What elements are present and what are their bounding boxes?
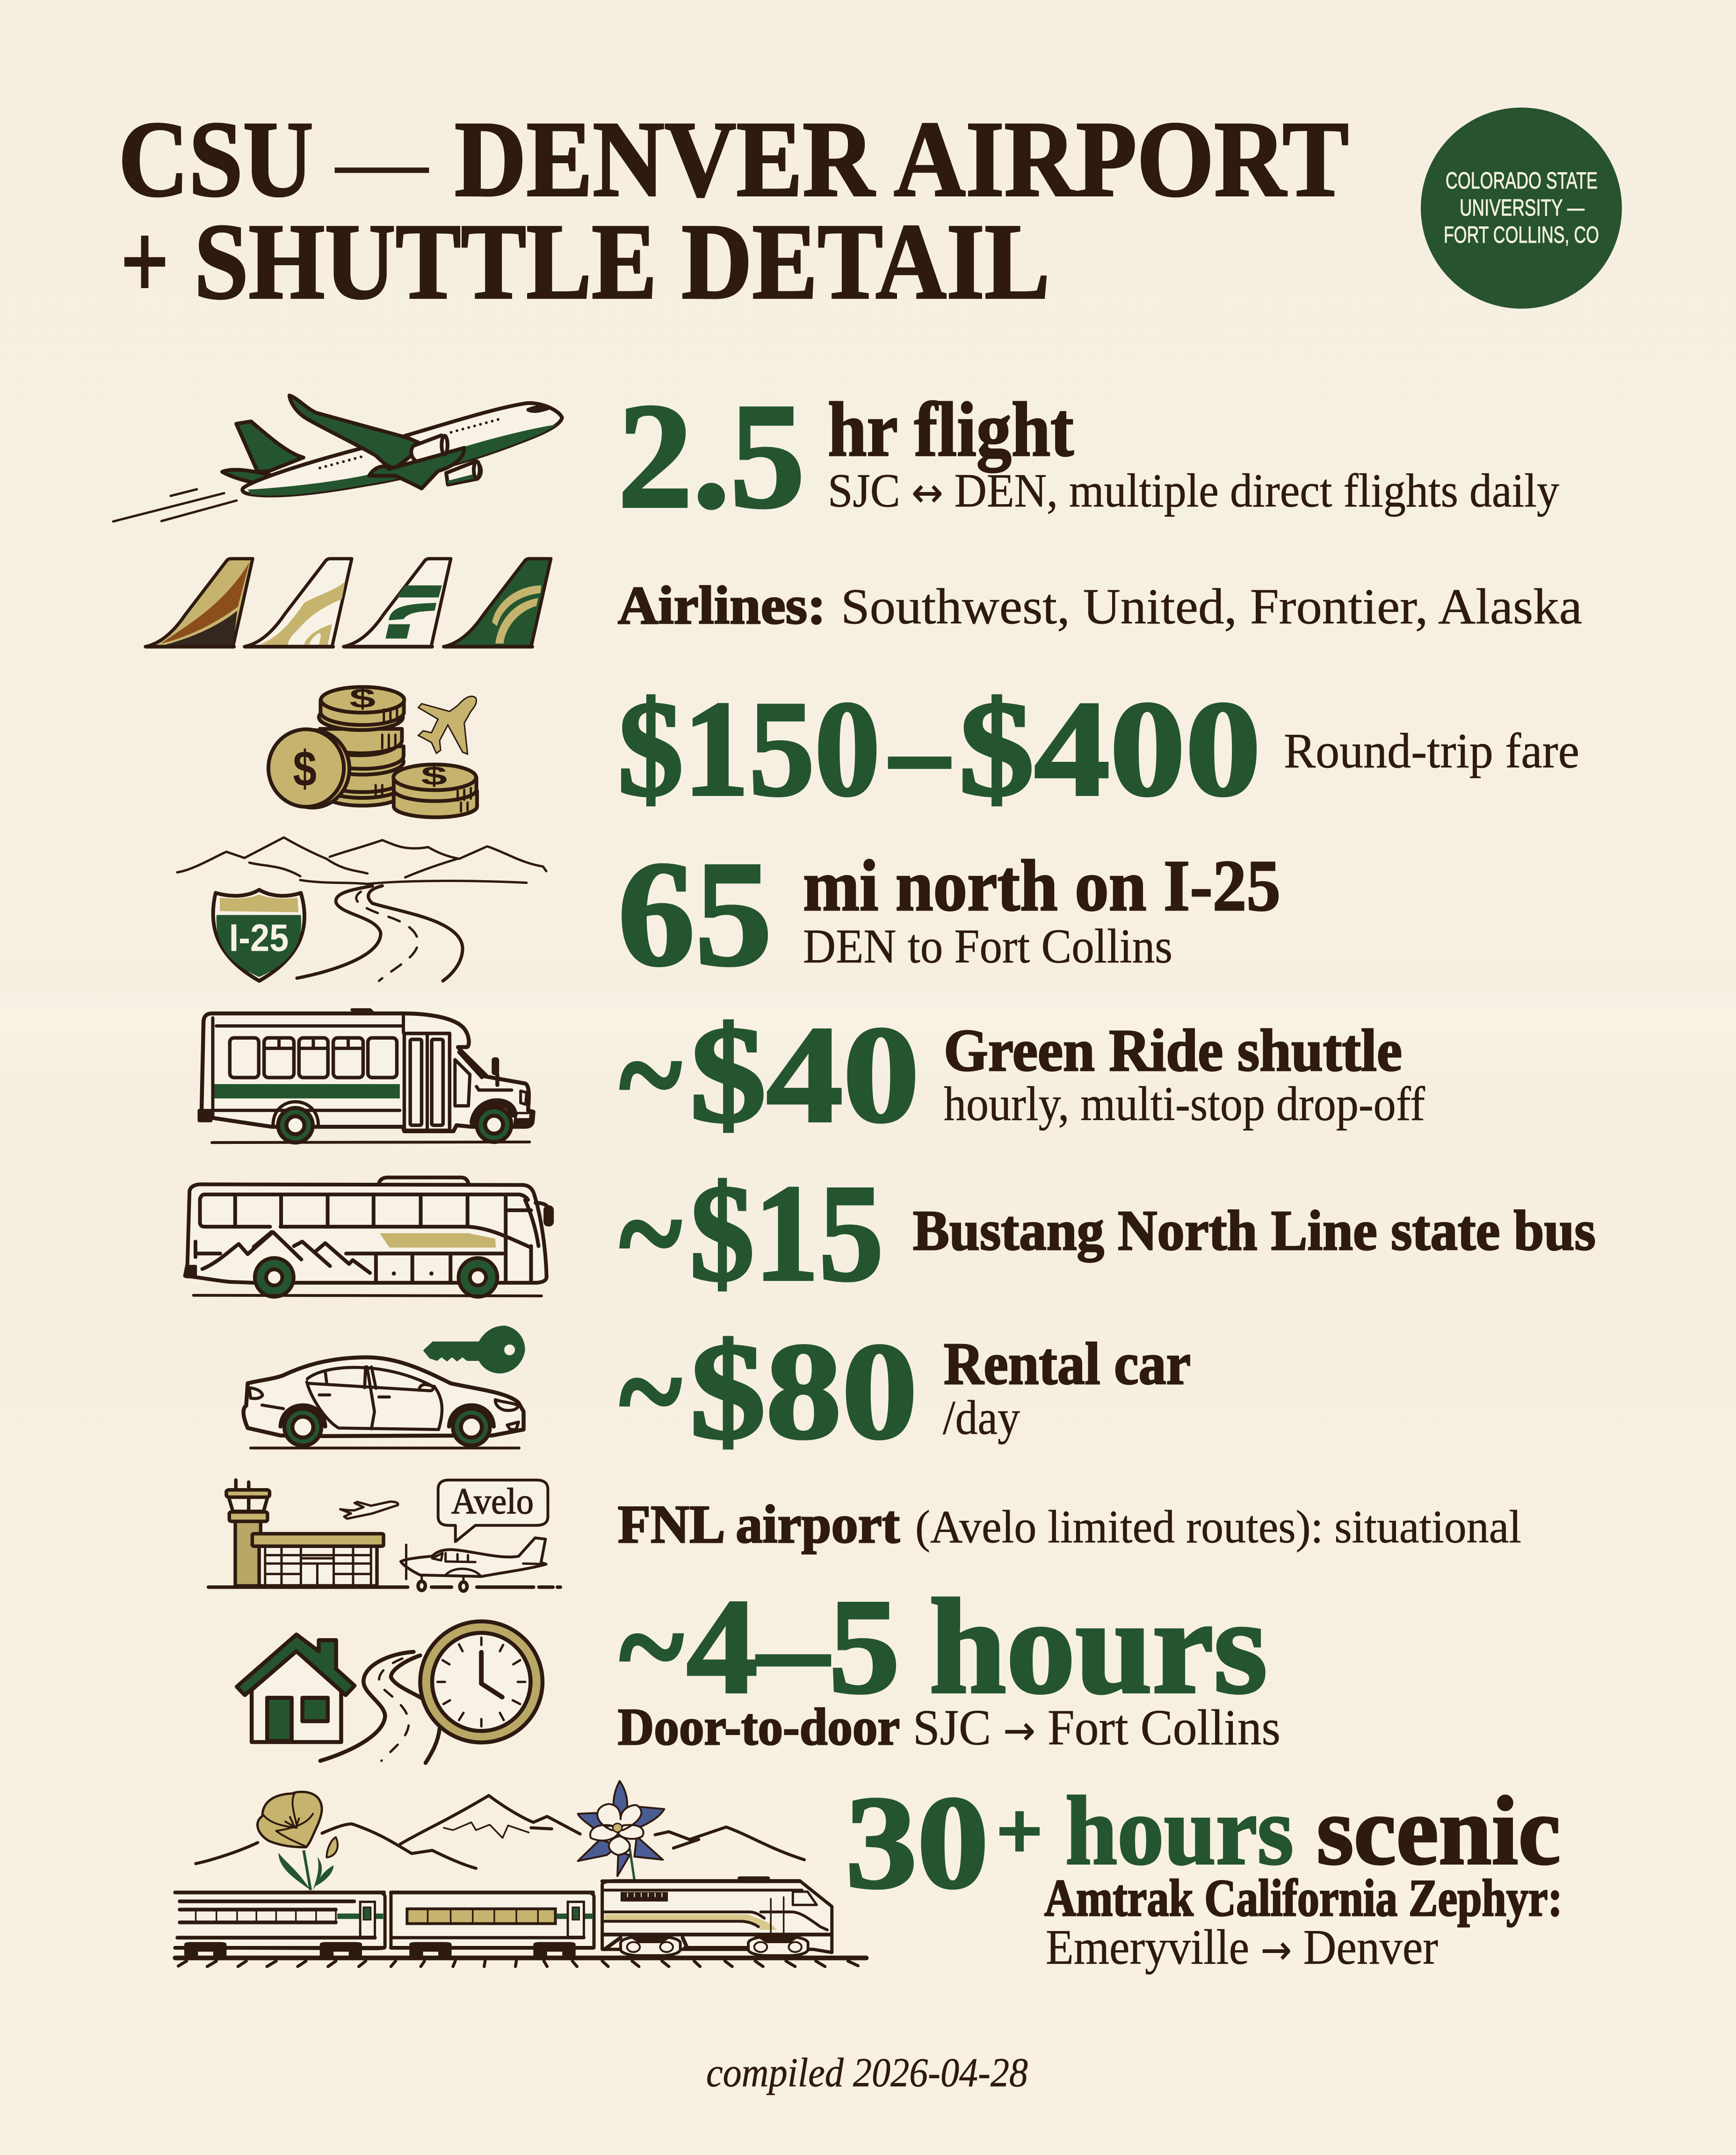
stat: fare range	[618, 673, 1261, 824]
stat: 30+	[846, 1769, 1042, 1916]
passenger car two	[391, 1893, 594, 1956]
stat: 30+: 30	[846, 1769, 989, 1916]
stat: ~$40	[620, 998, 919, 1151]
tail two	[245, 559, 352, 647]
badge: Colorado State University: COLORADO STATE	[1446, 167, 1598, 194]
title: DENVER AIRPORT	[455, 99, 1349, 219]
row: state bus	[185, 1157, 1596, 1310]
stat: ~$80: $80	[690, 1315, 918, 1468]
stat: fare range: –	[888, 673, 951, 824]
title: SHUTTLE DETAIL	[194, 202, 1050, 322]
tail four	[444, 559, 551, 647]
stat: ~$15: $15	[690, 1157, 883, 1310]
heading: scenic: scenic	[1316, 1777, 1561, 1885]
text: route: SJC ↔ DEN, multiple direct flights daily	[828, 464, 1559, 517]
track	[175, 1958, 866, 1967]
badge: Colorado State University	[1421, 108, 1622, 309]
heading: FNL airport: FNL airport	[618, 1495, 900, 1555]
stat: ~$40: $40	[690, 998, 919, 1151]
stat: ~4–5 hours: hours	[929, 1571, 1267, 1721]
icon: airport terminal and small plane	[209, 1480, 560, 1591]
heading: hr flight: hr flight	[828, 386, 1074, 473]
footer: compiled date: compiled 2026-04-28	[706, 2050, 1028, 2096]
icon: four tail fins	[145, 559, 551, 647]
title	[118, 99, 1349, 322]
icon: coins with plane	[268, 683, 477, 817]
text: hourly drop-off: hourly, multi-stop drop-off	[944, 1077, 1425, 1131]
label: Amtrak California Zephyr: Amtrak California Zephyr:	[1044, 1869, 1562, 1927]
text: round-trip fare: Round-trip fare	[1284, 723, 1579, 778]
heading: Rental car: Rental car	[944, 1331, 1191, 1397]
title: +	[121, 202, 169, 322]
heading: Green Ride shuttle: Green Ride shuttle	[944, 1017, 1402, 1084]
shield: I-25	[229, 916, 289, 960]
stat: ~4–5 hours: ~	[620, 1571, 683, 1721]
row: Amtrak scenic	[175, 1769, 1562, 1974]
icon: train, mountains and flowers	[175, 1781, 866, 1967]
icon: coins with plane: $	[349, 683, 376, 714]
badge: Colorado State University: UNIVERSITY —	[1460, 195, 1584, 221]
icon: shuttle bus	[197, 1010, 534, 1143]
icon: house, road and clock	[237, 1621, 542, 1763]
stat: ~4–5 hours	[620, 1571, 1267, 1721]
tail one	[145, 559, 253, 647]
icon: coins with plane: $	[293, 741, 317, 797]
heading: mi north on I-25: mi north on I-25	[803, 845, 1280, 926]
stat: ~$80	[620, 1315, 918, 1468]
passenger car one	[175, 1893, 385, 1956]
key	[423, 1326, 525, 1374]
row: door-to-door time	[237, 1571, 1280, 1763]
text: Avelo limited routes: (Avelo limited routes): situational	[915, 1501, 1521, 1553]
label: Airlines: Airlines:	[618, 576, 826, 636]
icon: car and key	[244, 1326, 525, 1448]
text: airline names: Southwest, United, Frontier, Alaska	[841, 579, 1582, 635]
text: Emeryville to Denver: Emeryville → Denver	[1046, 1920, 1438, 1974]
title: —	[334, 99, 429, 219]
stat: ~$80: ~	[620, 1315, 681, 1468]
poppy	[258, 1792, 338, 1890]
icon: mountains, road and I-25 shield	[177, 838, 546, 981]
row: rental car	[244, 1315, 1191, 1468]
row: distance	[177, 830, 1280, 997]
heading: Bustang North Line state bus: Bustang North Line state bus	[913, 1199, 1596, 1262]
stat: fare range: $150	[618, 673, 880, 824]
mountains	[196, 1795, 804, 1868]
text: per day: /day	[943, 1391, 1020, 1445]
columbine	[578, 1781, 664, 1880]
row: FNL airport	[209, 1480, 1521, 1591]
stat: fare range: $400	[959, 673, 1261, 824]
stat: ~$15: ~	[620, 1157, 681, 1310]
stat: 65: 65	[618, 830, 772, 997]
text: DEN to Fort Collins: DEN to Fort Collins	[803, 919, 1172, 973]
text: SJC to Fort Collins: SJC → Fort Collins	[913, 1700, 1280, 1756]
icon: airport terminal and small plane: Avelo	[451, 1481, 534, 1521]
stat: ~4–5 hours: 4–5	[687, 1571, 900, 1721]
shield	[213, 890, 304, 981]
row: airlines	[145, 559, 1582, 647]
stat: 30+: +	[997, 1787, 1042, 1876]
stat: ~$40: ~	[620, 998, 681, 1151]
stat: 2.5: 2.5	[618, 372, 805, 539]
row: fare	[268, 673, 1579, 824]
row: shuttle	[197, 998, 1425, 1151]
tail three	[344, 559, 451, 647]
badge: Colorado State University: FORT COLLINS, CO	[1444, 222, 1599, 248]
label: Door-to-door: Door-to-door	[618, 1698, 900, 1756]
stat: ~$15	[620, 1157, 883, 1310]
title: CSU	[118, 99, 313, 219]
icon: coach bus	[185, 1178, 552, 1297]
heading: hours: hours	[1065, 1777, 1294, 1885]
icon: airplane taking off	[113, 396, 562, 521]
icon: coins with plane: $	[421, 762, 447, 791]
row: flight time	[113, 372, 1559, 539]
locomotive	[602, 1876, 832, 1956]
